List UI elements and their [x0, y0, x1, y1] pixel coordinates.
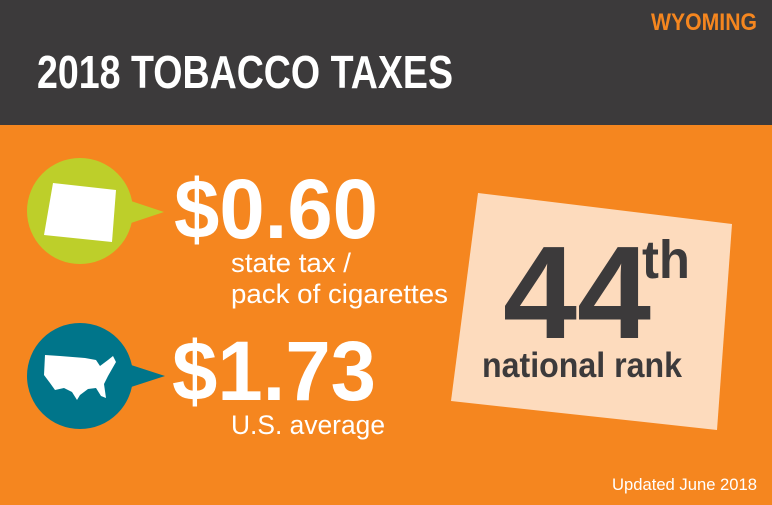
state label: WYOMING — [651, 9, 757, 36]
state tax caption: state tax / — [231, 248, 352, 278]
icon: Wyoming speech bubble — [27, 158, 164, 264]
US average caption: U.S. average — [231, 410, 385, 440]
icon: US speech bubble — [27, 323, 165, 429]
title: 2018 TOBACCO TAXES — [37, 46, 453, 98]
state tax value — [174, 162, 448, 309]
footer note: Updated June 2018 — [612, 475, 757, 494]
rank number: 44 — [503, 219, 651, 366]
US average value: $1.73 — [172, 324, 376, 418]
rank panel — [451, 193, 732, 430]
state tax value: pack of cigarettes — [231, 279, 448, 309]
state tax value: $0.60 — [174, 162, 378, 256]
header bar — [0, 0, 772, 125]
rank panel: th — [642, 230, 690, 290]
rank caption: national rank — [482, 346, 682, 385]
